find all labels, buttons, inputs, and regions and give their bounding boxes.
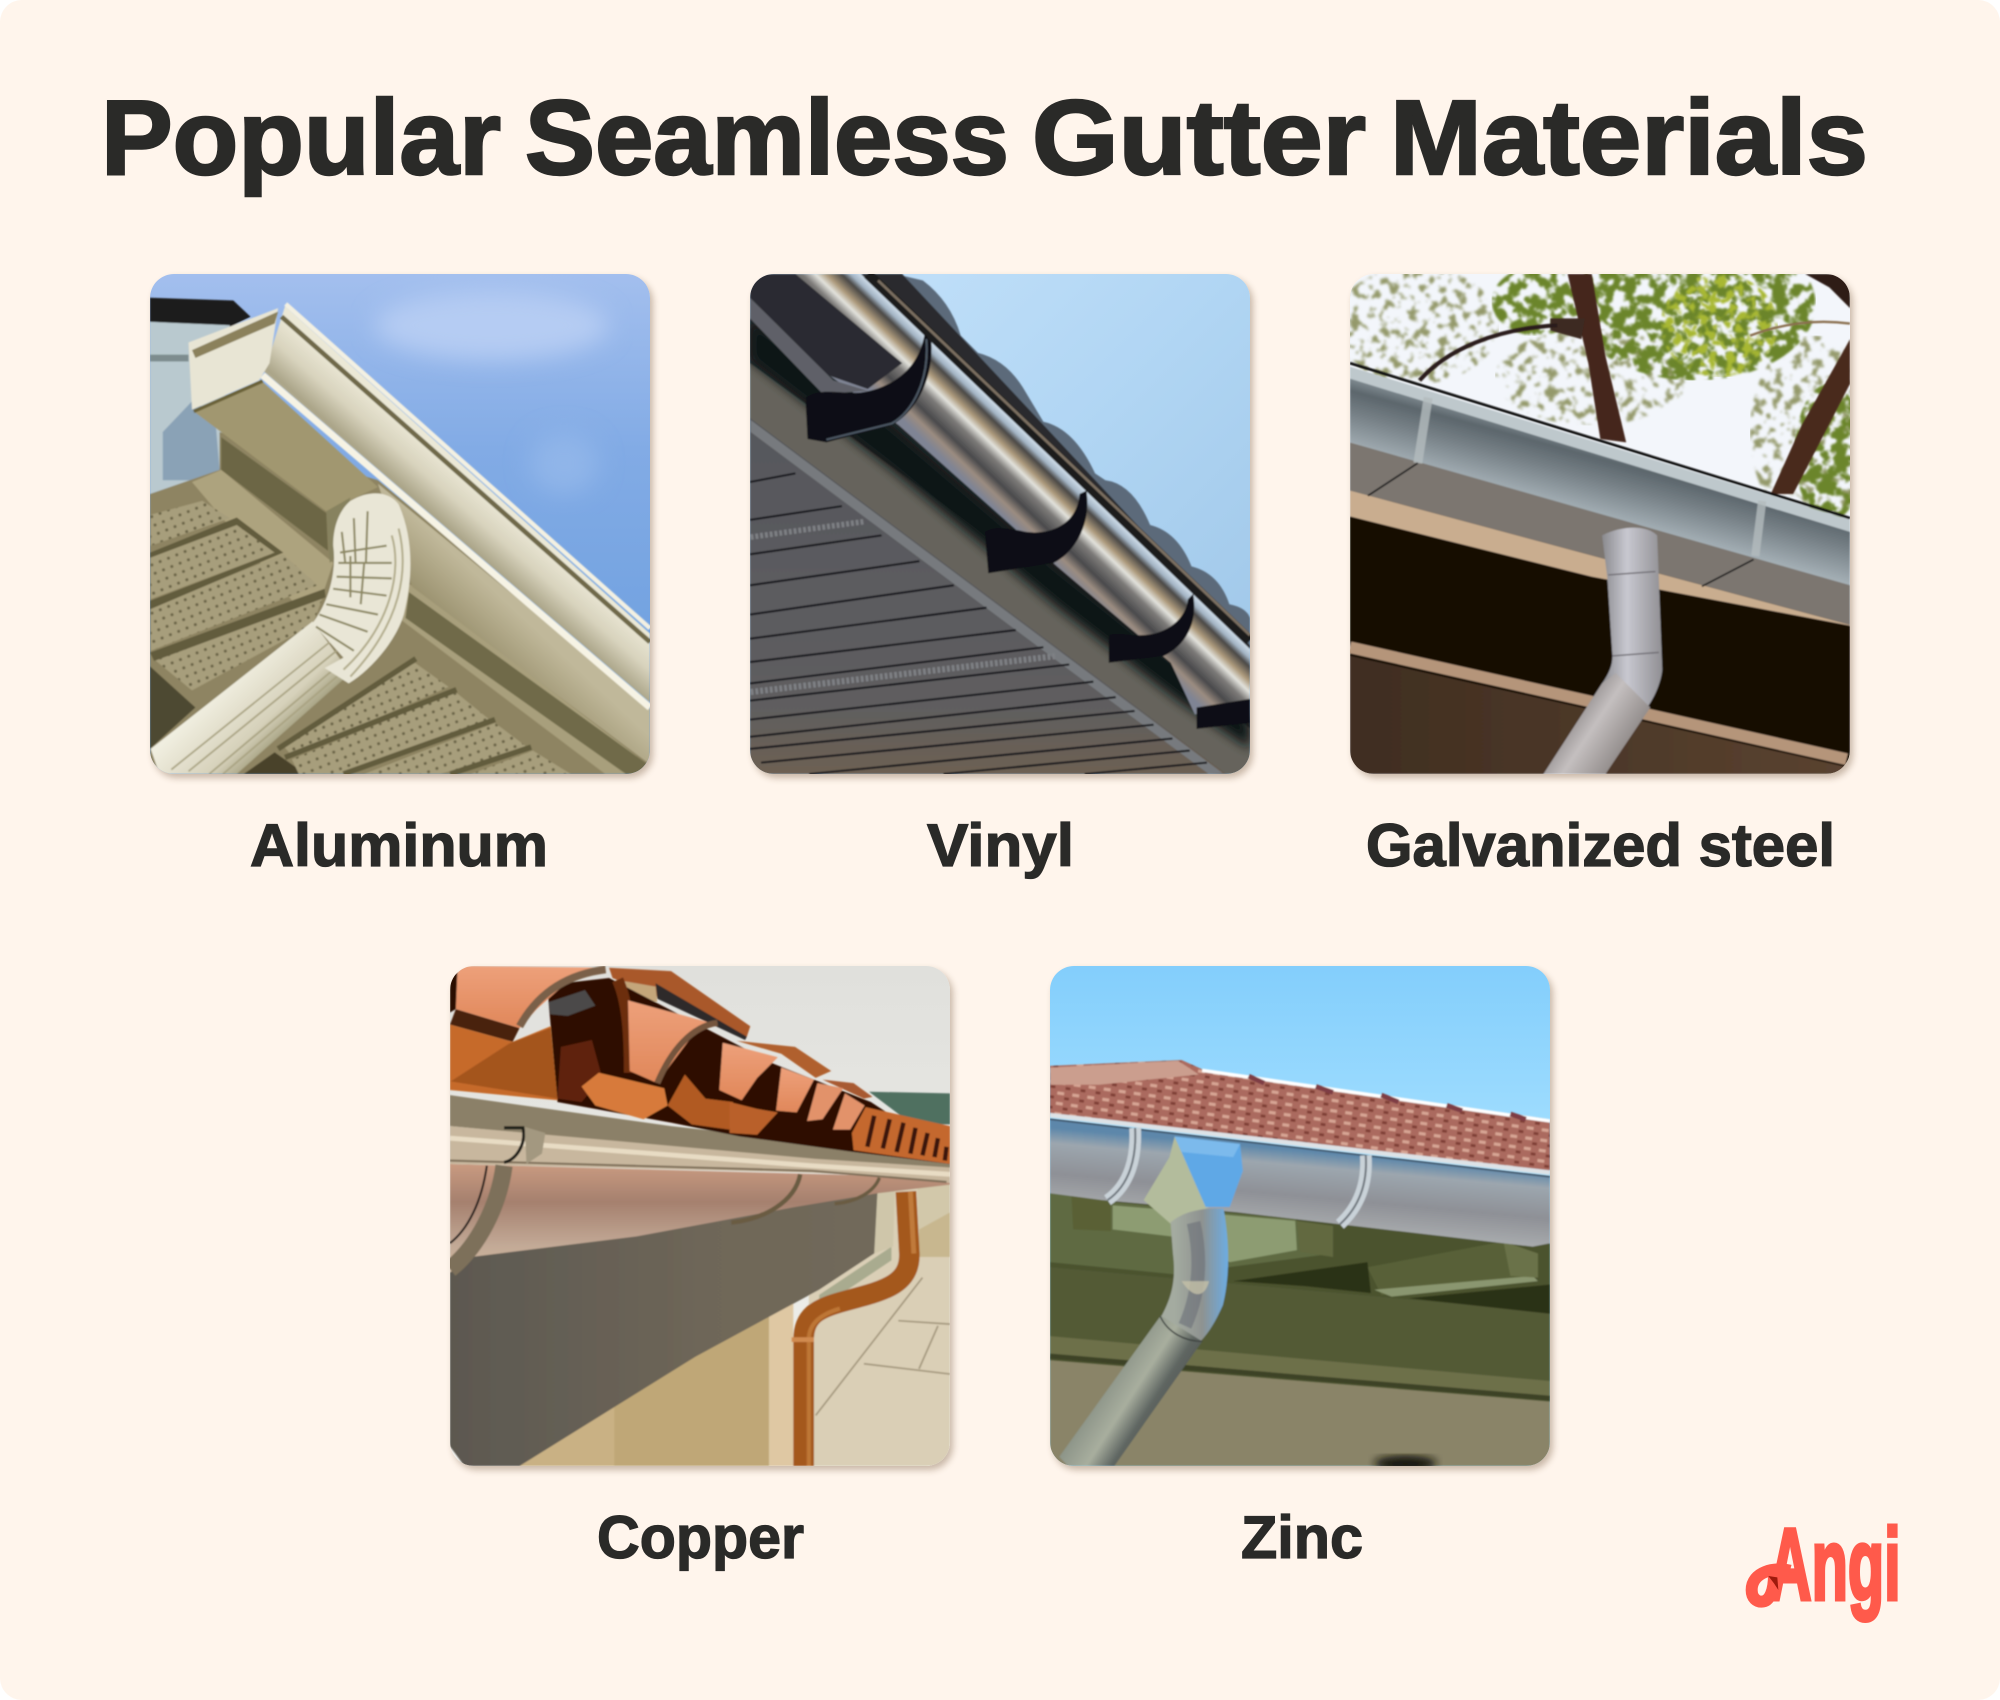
logo loop swash: [1752, 1569, 1790, 1602]
photo: copper gutter: [450, 966, 950, 1466]
panel: zinc: [1049, 966, 1557, 1571]
panel: galvanized steel: [1349, 274, 1857, 879]
title: [101, 79, 1868, 198]
photo: zinc gutter: [1050, 966, 1550, 1466]
title: Gutter: [1032, 79, 1366, 197]
title: Materials: [1390, 79, 1868, 197]
photo: galvanized steel gutter: [1350, 274, 1850, 774]
photo: aluminum gutter: [150, 274, 650, 774]
label: Vinyl: Vinyl: [927, 812, 1074, 879]
panel: vinyl: [749, 274, 1840, 880]
panel: aluminum: [149, 274, 1840, 879]
label: Copper: Copper: [597, 1504, 804, 1571]
label: Galvanized steel: Galvanized steel: [1366, 812, 1835, 879]
title: Popular: [101, 79, 501, 197]
label: Aluminum: Aluminum: [250, 812, 548, 879]
photo: vinyl gutter: [750, 274, 1250, 774]
panel: copper: [449, 966, 1274, 1572]
logo: Angi: [1746, 1507, 1901, 1623]
label: Zinc: Zinc: [1241, 1504, 1363, 1571]
title: Seamless: [525, 79, 1009, 197]
